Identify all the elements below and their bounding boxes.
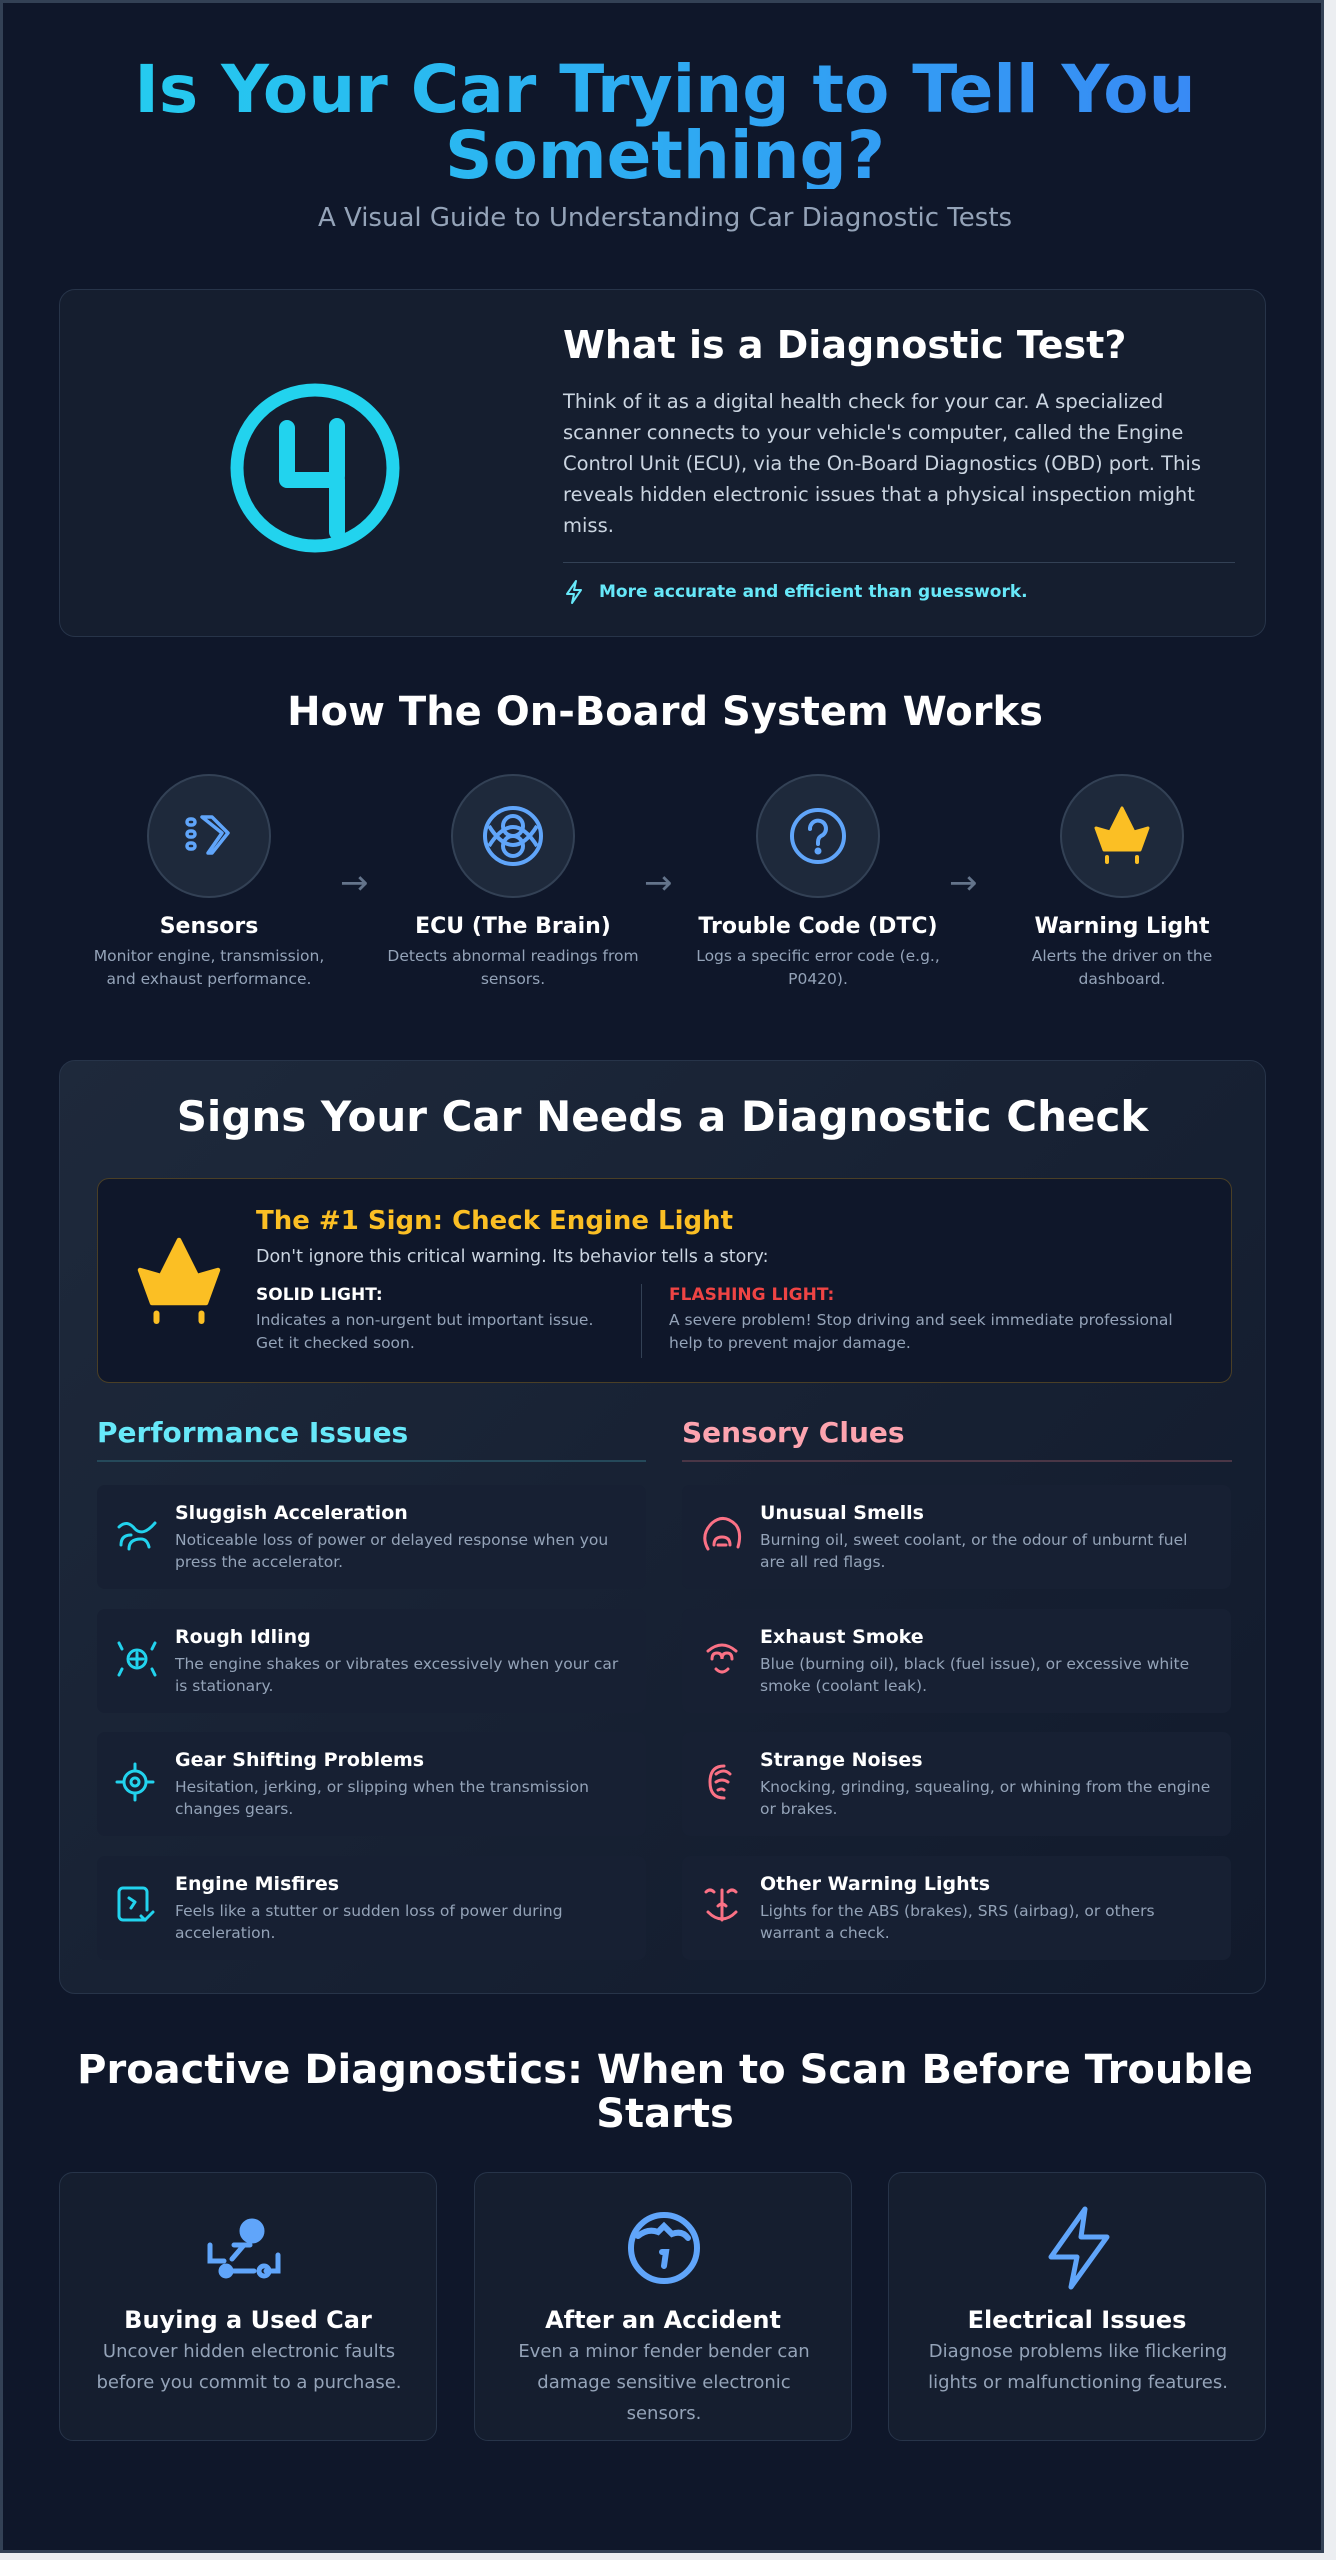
icon: warning crown <box>1060 774 1184 898</box>
title: Something? <box>445 117 885 194</box>
step: ecu: Detects abnormal readings from sensors. <box>387 947 639 988</box>
card: used car: Buying a Used Car <box>124 2306 372 2334</box>
callout: check engine light: The #1 Sign: Check Engine Light <box>256 1206 733 1236</box>
paragraph: Think of it as a digital health check for your car. A specialized scanner connects to your vehicle's computer, called the Engine Control Unit (ECU), via the On-Board Diagnostics (OBD) port. This reveals hidden electronic issues that a physical inspection might miss. <box>563 390 1201 537</box>
step: dtc: Trouble Code (DTC) <box>698 914 938 939</box>
heading: sensory clues: Sensory Clues <box>682 1416 905 1449</box>
icon: diagnostic gauge <box>230 384 400 552</box>
panel: signs <box>59 1060 1266 1994</box>
card: electrical: Diagnose problems like flickering lights or malfunctioning features. <box>928 2341 1228 2393</box>
step: warning light: Warning Light <box>1035 914 1209 939</box>
card: smells: Burning oil, sweet coolant, or the odour of unburnt fuel are all red flags. <box>760 1531 1187 1571</box>
icon: sensors <box>147 774 271 898</box>
icon: engine light <box>138 1238 220 1324</box>
solid light: Indicates a non-urgent but important issue. Get it checked soon. <box>256 1311 593 1352</box>
solid light <box>256 1285 593 1352</box>
card: accident: After an Accident <box>545 2306 781 2334</box>
card: other lights <box>682 1856 1231 1960</box>
title <box>3 57 1327 189</box>
card: rough idling: The engine shakes or vibrates excessively when your car is stationary. <box>175 1655 618 1695</box>
card: other lights: Lights for the ABS (brakes), SRS (airbag), or others warrant a check. <box>760 1902 1155 1942</box>
title: Is Your Car Trying to Tell You <box>134 51 1196 128</box>
callout: check engine light: Don't ignore this critical warning. Its behavior tells a story: <box>256 1247 769 1267</box>
icon: question <box>756 774 880 898</box>
step: warning light <box>1032 774 1212 988</box>
arrow: → <box>949 863 978 903</box>
card: exhaust smoke <box>682 1609 1231 1713</box>
step: dtc <box>696 774 940 988</box>
card: other lights: Other Warning Lights <box>760 1873 990 1895</box>
flashing light <box>669 1285 1173 1352</box>
card: used car: Uncover hidden electronic faults before you commit to a purchase. <box>96 2341 402 2393</box>
card: used car <box>59 2172 437 2441</box>
heading: proactive diagnostics: Proactive Diagnostics: When to Scan Before Trouble Starts <box>77 2047 1253 2137</box>
step: sensors <box>94 774 324 988</box>
heading: performance issues <box>97 1416 646 1462</box>
card: electrical: Electrical Issues <box>968 2306 1186 2334</box>
solid light: SOLID LIGHT: <box>256 1285 383 1305</box>
card: noises: Strange Noises <box>760 1749 923 1771</box>
icon: lightning <box>1048 2206 1110 2290</box>
card: engine misfires <box>97 1856 646 1960</box>
flashing light: A severe problem! Stop driving and seek immediate professional help to prevent major damage. <box>669 1311 1173 1352</box>
step: dtc: Logs a specific error code (e.g., P0420). <box>696 947 940 988</box>
card: rough idling <box>97 1609 646 1713</box>
card: electrical <box>888 2172 1266 2441</box>
subtitle: A Visual Guide to Understanding Car Diagnostic Tests <box>318 203 1012 233</box>
heading: performance issues: Performance Issues <box>97 1416 408 1449</box>
icon: accident <box>628 2212 700 2284</box>
step: ecu <box>387 774 639 988</box>
card: exhaust smoke: Exhaust Smoke <box>760 1626 924 1648</box>
arrow: → <box>340 863 368 903</box>
card: noises: Knocking, grinding, squealing, or whining from the engine or brakes. <box>760 1778 1210 1818</box>
card: exhaust smoke: Blue (burning oil), black (fuel issue), or excessive white smoke (coolant leak). <box>760 1655 1189 1695</box>
card: sluggish: Sluggish Acceleration <box>175 1502 408 1524</box>
callout: check engine light <box>97 1178 1232 1383</box>
card: engine misfires: Feels like a stutter or sudden loss of power during acceleration. <box>175 1902 563 1942</box>
card: sluggish <box>97 1485 646 1589</box>
flashing light: FLASHING LIGHT: <box>669 1285 834 1305</box>
heading: sensory clues <box>682 1416 1232 1462</box>
card: smells: Unusual Smells <box>760 1502 924 1524</box>
step: sensors: Sensors <box>160 914 258 939</box>
card: accident <box>474 2172 852 2441</box>
card: gear shifting: Hesitation, jerking, or slipping when the transmission changes gears. <box>175 1778 589 1818</box>
card: smells <box>682 1485 1231 1589</box>
heading: Signs Your Car Needs a Diagnostic Check <box>177 1092 1148 1141</box>
arrow: → <box>644 863 672 903</box>
card: accident: Even a minor fender bender can damage sensitive electronic sensors. <box>518 2341 810 2424</box>
card: noises <box>682 1732 1231 1836</box>
icon: ecu <box>451 774 575 898</box>
card: engine misfires: Engine Misfires <box>175 1873 339 1895</box>
card: gear shifting: Gear Shifting Problems <box>175 1749 424 1771</box>
step: sensors: Monitor engine, transmission, and exhaust performance. <box>94 947 324 988</box>
panel: what is a diagnostic test <box>59 289 1266 637</box>
heading: how system works: How The On-Board System Works <box>287 689 1043 735</box>
card: rough idling: Rough Idling <box>175 1626 311 1648</box>
card: gear shifting <box>97 1732 646 1836</box>
card: sluggish: Noticeable loss of power or delayed response when you press the accelerator. <box>175 1531 608 1571</box>
step: warning light: Alerts the driver on the dashboard. <box>1032 947 1212 988</box>
callout: accuracy: More accurate and efficient than guesswork. <box>599 582 1028 602</box>
icon: used car <box>208 2218 280 2278</box>
step: ecu: ECU (The Brain) <box>415 914 611 939</box>
heading: What is a Diagnostic Test? <box>563 323 1126 367</box>
